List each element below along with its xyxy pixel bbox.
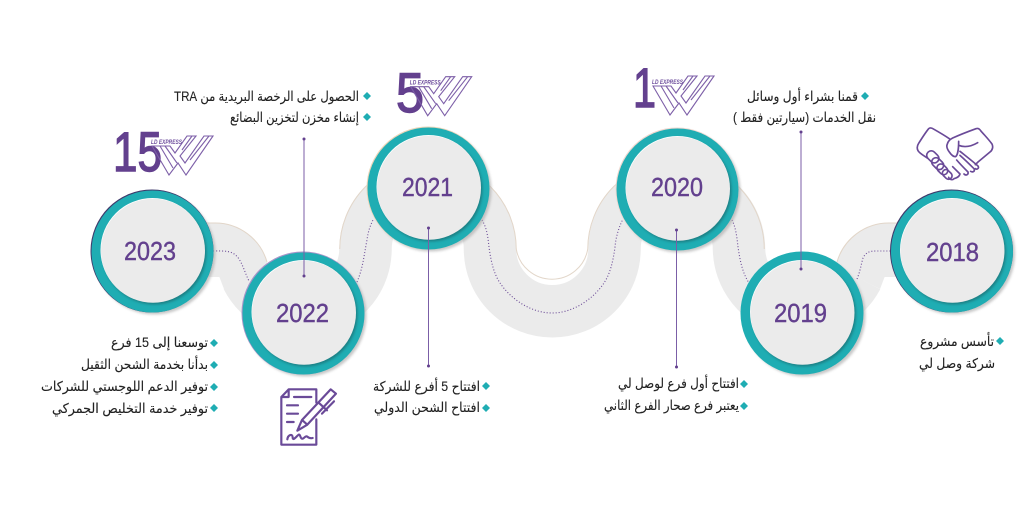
bullet [861,92,869,100]
year node: 2021 [366,126,492,252]
year node: 2023: 2023 [124,236,176,266]
logo: 1 branch: LD EXPRESS [652,79,683,86]
logo: 15 branches: 15 [113,120,162,183]
year node: 2020 [616,128,740,252]
text block: 2023 milestones [41,335,218,417]
logo: 5 branches: LD EXPRESS [410,80,441,87]
text block: 2020 milestones: افتتاح أول فرع لوصل لي [618,374,739,392]
year node: 2022: 2022 [276,298,329,328]
text block: 2019 milestones: قمنا بشراء أول وسائل [747,87,858,105]
year node: 2021: 2021 [402,172,453,202]
bullet [363,92,371,100]
leader line: 2021 [427,226,430,368]
bullet [482,382,490,390]
bullet [996,337,1004,345]
text block: 2020 milestones: يعتبر فرع صحار الفرع الثاني [604,398,739,414]
logo: 15 branches [113,120,213,183]
text block: 2023 milestones: توفير الدعم اللوجستي للشركات [41,379,208,395]
text block: 2019 milestones [733,87,876,126]
text block: 2020 milestones [604,374,748,414]
text block: 2023 milestones: توفير خدمة التخليص الجمركي [52,401,208,417]
bullet [740,380,748,388]
text block: 2019 milestones: نقل الخدمات (سيارتين فقط ) [733,110,876,126]
winding timeline ribbon [152,161,952,311]
year node: 2019: 2019 [774,298,827,328]
text block: 2022 milestones [174,89,371,126]
text block: 2018 milestones: تأسس مشروع [920,332,994,350]
text block: 2022 milestones: إنشاء مخزن لتخزين البضائع [230,110,359,126]
year node: 2018 [890,190,1015,314]
leader line: 2020 [675,228,678,368]
bullet [210,339,218,347]
icon: handshake [917,128,993,181]
logo: 15 branches: LD EXPRESS [151,139,182,146]
text block: 2023 milestones: توسعنا إلى 15 فرع [111,335,208,351]
text block: 2021 milestones [373,377,490,416]
logo: 5 branches [396,61,472,124]
year node: 2022 [242,252,366,376]
dotted connector path [213,219,891,313]
year node: 2019 [740,252,866,376]
logo: 1 branch: 1 [633,56,656,119]
logo: 5 branches: 5 [396,61,424,124]
text block: 2018 milestones: شركة وصل لي [919,356,995,372]
text block: 2021 milestones: افتتاح الشحن الدولي [374,400,480,416]
year node: 2023 [90,190,216,314]
text block: 2022 milestones: الحصول على الرخصة البريدية من TRA [174,89,359,105]
leader line: 2019 [800,130,802,270]
logo: 1 branch [633,56,714,119]
year node: 2018: 2018 [926,237,979,267]
text block: 2023 milestones: بدأنا بخدمة الشحن الثقيل [81,355,208,373]
text block: 2018 milestones [919,332,1004,372]
leader line: 2022 [302,138,306,278]
year node: 2020: 2020 [651,172,703,202]
icon: signed document [281,389,336,445]
text block: 2021 milestones: افتتاح 5 أفرع للشركة [373,377,480,395]
